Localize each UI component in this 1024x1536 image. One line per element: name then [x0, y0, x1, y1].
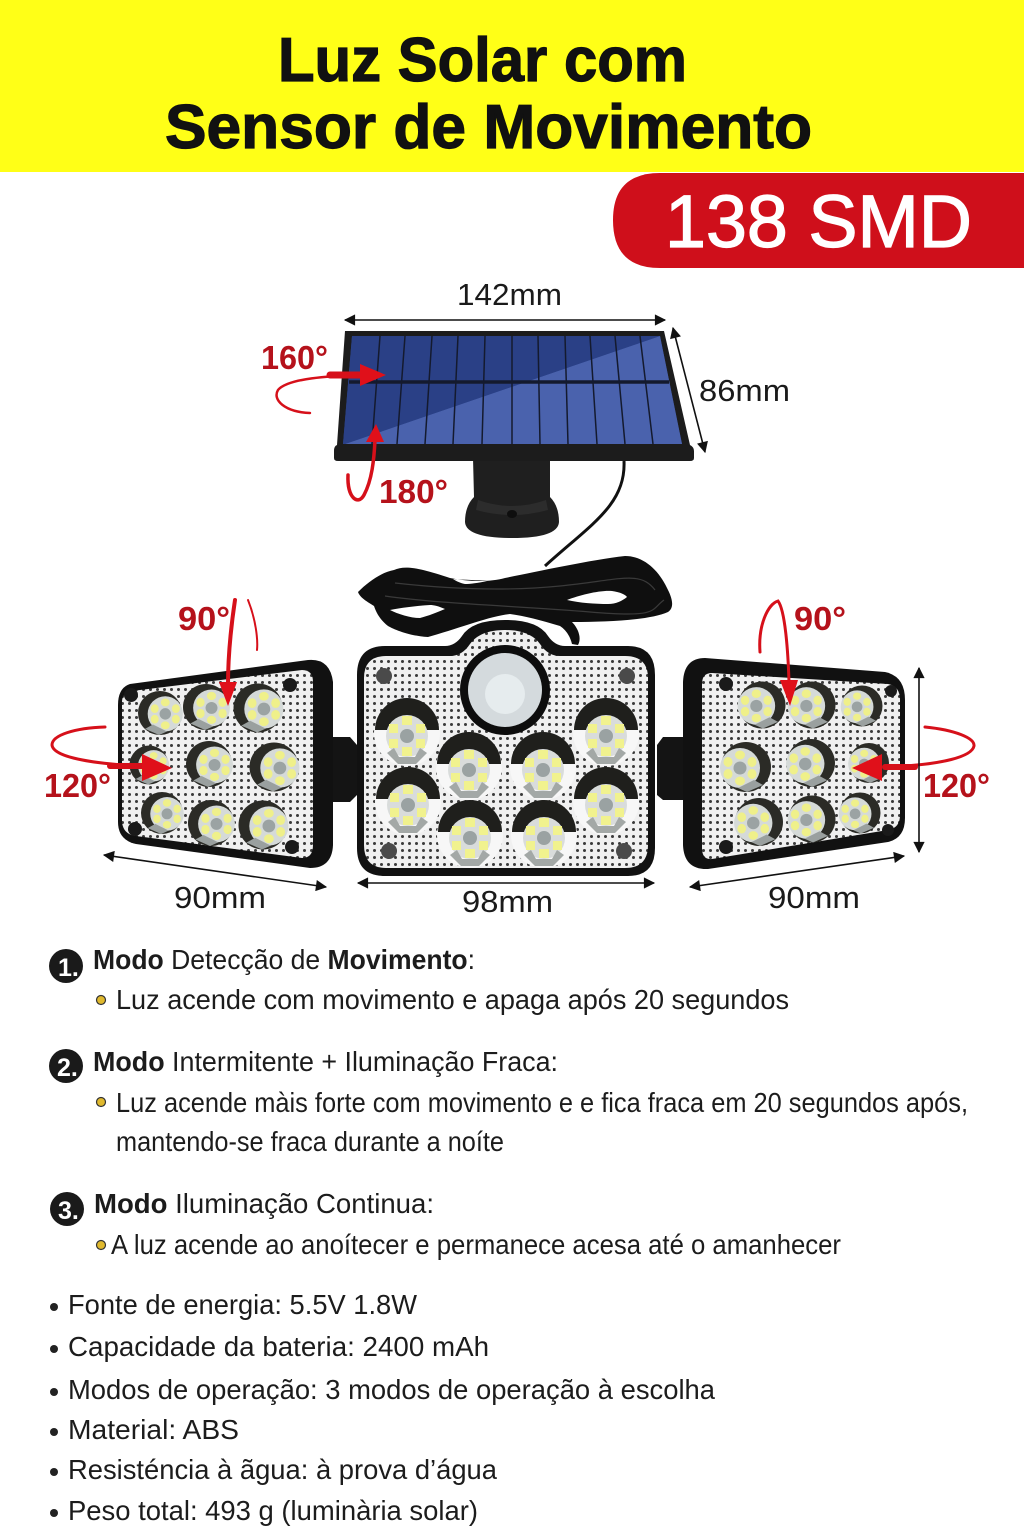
dimension lines and labels: 90mm: [174, 880, 266, 915]
arrow: right 120 degrees: [852, 727, 974, 781]
rotation labels: [44, 339, 990, 804]
left LED head: [118, 660, 357, 868]
solar cells: [343, 336, 682, 444]
badge: 138 SMD: 138 SMD: [665, 180, 972, 263]
dimension lines and labels: 90mm: [768, 880, 860, 915]
specifications list: Resisténcia à ãgua: à prova d’água: [68, 1454, 497, 1485]
arrow: right 90 degrees: [760, 601, 798, 706]
connector: [327, 737, 357, 802]
dimension lines and labels: [104, 277, 919, 919]
mode 2: Modo Intermitente + Iluminação Fraca:: [93, 1046, 558, 1077]
mode 3: [50, 1188, 841, 1260]
mode 2: [49, 1046, 968, 1157]
arrow: 180 degrees: [348, 424, 384, 500]
right LED head: [657, 658, 905, 869]
specifications list: Material: ABS: [68, 1414, 239, 1445]
mode 3: Modo Iluminação Continua:: [94, 1188, 434, 1219]
rotation labels: 180°: [379, 473, 448, 510]
arrow: left 90 degrees: [219, 600, 257, 706]
mode 1: Luz acende com movimento e apaga após 20 segundos: [116, 984, 789, 1015]
mode 2: mantendo-se fraca durante a noíte: [116, 1126, 504, 1157]
badge: 138 SMD: [613, 173, 1024, 268]
specifications list: Peso total: 493 g (luminària solar): [68, 1495, 478, 1526]
dimension lines and labels: 142mm: [457, 277, 562, 312]
mode 1: [49, 944, 789, 1015]
specifications list: [50, 1289, 715, 1526]
number badge 3: 3.: [58, 1197, 79, 1225]
number badge 3: [50, 1192, 84, 1226]
number badge 2: [49, 1049, 83, 1083]
header band with title: Sensor de Movimento: [165, 93, 812, 162]
rotation labels: 90°: [178, 600, 230, 637]
mode 1: Modo Detecção de Movimento:: [93, 944, 475, 975]
rotation labels: 90°: [794, 600, 846, 637]
number badge 1: [49, 949, 83, 983]
specifications list: Capacidade da bateria: 2400 mAh: [68, 1331, 489, 1362]
connector: [657, 737, 690, 800]
panel frame: [334, 331, 694, 461]
rotation arrows: [52, 364, 974, 781]
motion sensor: [460, 645, 550, 735]
number badge 2: 2.: [57, 1054, 78, 1082]
number badge 1: 1.: [58, 954, 79, 982]
rotation labels: 120°: [44, 767, 111, 804]
dimension lines and labels: 86mm: [699, 373, 790, 408]
header band with title: Luz Solar com: [278, 26, 687, 95]
specifications list: Modos de operação: 3 modos de operação à escolha: [68, 1374, 715, 1405]
rotation labels: 120°: [923, 767, 990, 804]
center LED head with motion sensor: [357, 620, 655, 876]
specifications list: Fonte de energia: 5.5V 1.8W: [68, 1289, 418, 1320]
cable coil: [358, 461, 672, 645]
panel stand: [465, 458, 559, 538]
header band with title: [0, 0, 1024, 172]
arrow: left 120 degrees: [52, 727, 172, 781]
arrow: 160 degrees: [277, 364, 386, 413]
solar panel: [334, 331, 694, 538]
dimension lines and labels: 98mm: [462, 884, 553, 919]
rotation labels: 160°: [261, 339, 328, 376]
mode 3: A luz acende ao anoítecer e permanece acesa até o amanhecer: [111, 1229, 841, 1260]
